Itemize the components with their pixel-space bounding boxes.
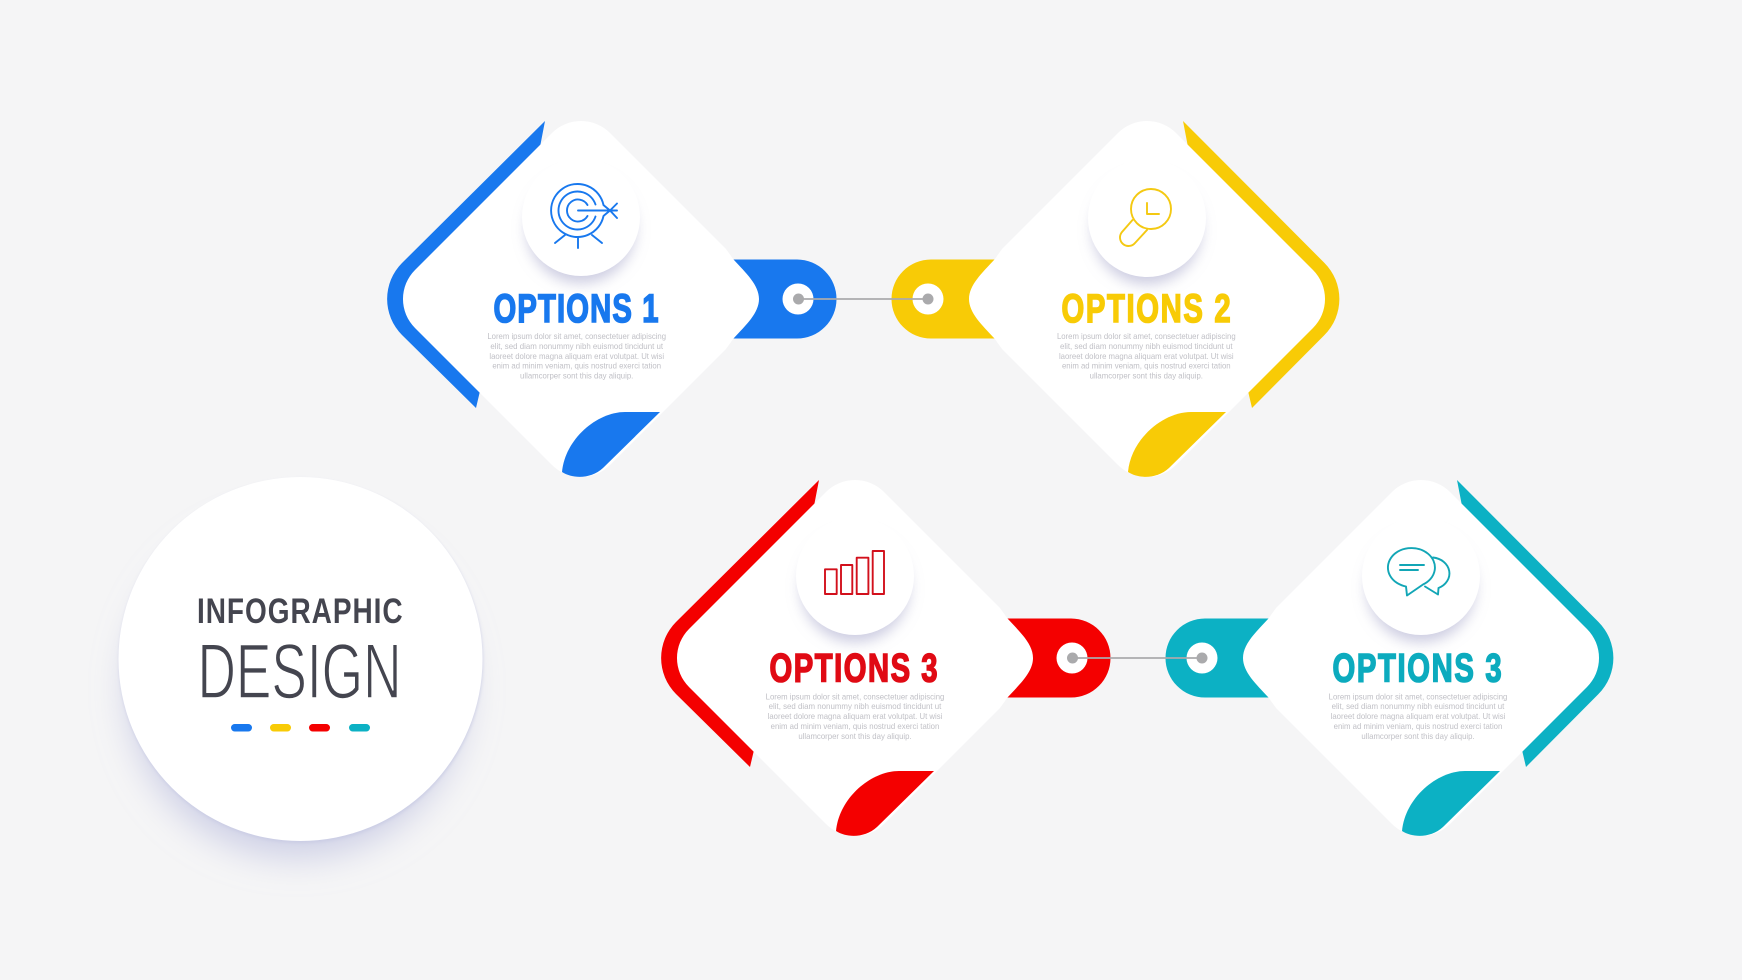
leaf accent — [836, 771, 934, 836]
body text — [487, 331, 666, 381]
body text: elit, sed diam nonummy nibh euismod tincidunt ut — [1060, 341, 1233, 351]
white diamond card — [969, 121, 1325, 477]
body text — [766, 691, 945, 741]
icon circle — [1362, 517, 1480, 642]
icon: magnifier with clock — [1120, 189, 1171, 246]
body text: Lorem ipsum dolor sit amet, consectetuer adipiscing — [1057, 331, 1236, 341]
heading: OPTIONS 2 — [1062, 288, 1231, 331]
body text: ullamcorper sont this day aliquip. — [1361, 731, 1475, 741]
body text: laoreet dolore magna aliquam erat volutpat. Ut wisi — [489, 351, 664, 361]
bracket: yellow — [1168, 121, 1339, 408]
icon circle — [796, 517, 914, 642]
icon: speech bubbles — [1388, 548, 1449, 596]
heading: OPTIONS 3 — [770, 648, 937, 691]
heading: OPTIONS 3 — [1332, 648, 1502, 691]
panel: options 3 red — [661, 480, 1110, 836]
body text — [1057, 331, 1236, 381]
body text: enim ad minim veniam, quis nostrud exerci tation — [771, 721, 940, 731]
body text: Lorem ipsum dolor sit amet, consectetuer adipiscing — [766, 691, 945, 701]
white diamond card — [1243, 480, 1599, 836]
leaf accent — [1128, 412, 1226, 477]
leaf accent — [1402, 771, 1500, 836]
icon circle — [1088, 159, 1206, 284]
bracket: teal — [1442, 480, 1613, 767]
icon: bar chart — [825, 551, 884, 594]
heading: OPTIONS 1 — [494, 288, 659, 331]
body text: elit, sed diam nonummy nibh euismod tincidunt ut — [769, 701, 942, 711]
body text: ullamcorper sont this day aliquip. — [520, 371, 633, 381]
body text: ullamcorper sont this day aliquip. — [798, 731, 912, 741]
tab: yellow — [892, 260, 999, 338]
body text: elit, sed diam nonummy nibh euismod tincidunt ut — [1332, 701, 1505, 711]
bracket: red — [661, 480, 834, 767]
panel: options 3 teal — [1166, 480, 1613, 836]
body text: elit, sed diam nonummy nibh euismod tincidunt ut — [490, 341, 664, 351]
body text: Lorem ipsum dolor sit amet, consectetuer adipiscing — [1329, 691, 1508, 701]
tab: teal — [1166, 618, 1273, 698]
panel: options 2 — [892, 121, 1339, 477]
body text: ullamcorper sont this day aliquip. — [1090, 371, 1203, 381]
tab: red — [1003, 618, 1110, 698]
icon: target with arrow — [551, 184, 617, 248]
body text: Lorem ipsum dolor sit amet, consectetuer adipiscing — [487, 331, 666, 341]
panel: center title circle — [118, 477, 483, 858]
body text: laoreet dolore magna aliquam erat volutpat. Ut wisi — [1059, 351, 1234, 361]
colour legend pills — [231, 724, 370, 732]
bracket: blue — [387, 121, 560, 408]
body text — [1329, 691, 1508, 741]
heading: design: DESIGN — [198, 627, 402, 715]
leaf accent — [562, 412, 660, 477]
body text: laoreet dolore magna aliquam erat volutpat. Ut wisi — [1331, 711, 1505, 721]
body text: enim ad minim veniam, quis nostrud exerci tation — [492, 361, 661, 371]
icon circle — [522, 158, 640, 283]
white circle with shadow — [118, 477, 483, 858]
connector: options 1 to options 2 — [782, 284, 944, 314]
body text: laoreet dolore magna aliquam erat volutpat. Ut wisi — [768, 711, 942, 721]
panel: options 1 — [387, 121, 836, 477]
white diamond card — [403, 121, 759, 477]
connector: options 3 red to options 3 teal — [1056, 642, 1218, 674]
body text: enim ad minim veniam, quis nostrud exerci tation — [1334, 721, 1503, 731]
body text: enim ad minim veniam, quis nostrud exerci tation — [1062, 361, 1231, 371]
heading: infographic: INFOGRAPHIC — [197, 591, 403, 631]
white diamond card — [677, 480, 1033, 836]
tab: blue — [729, 260, 836, 338]
